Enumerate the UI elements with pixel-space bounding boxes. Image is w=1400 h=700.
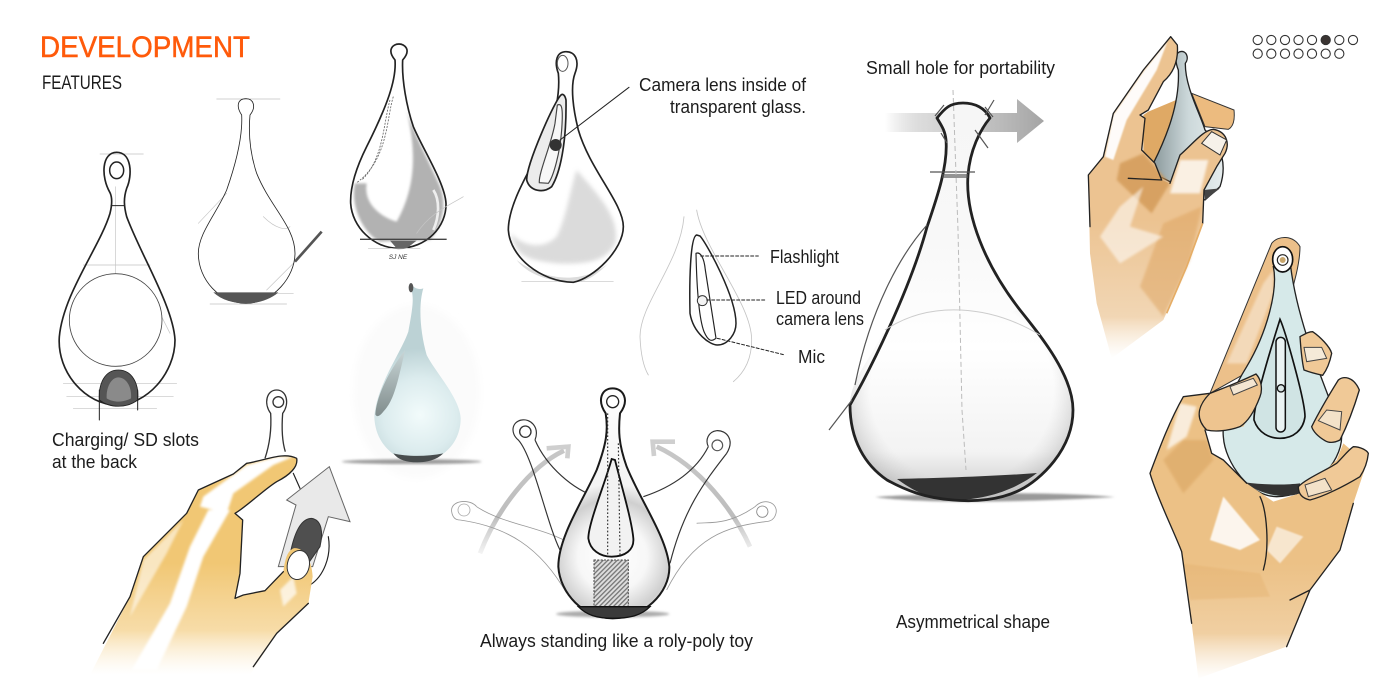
device [1153,51,1223,200]
hand highlights [130,457,297,670]
sketch: outline with pencil [198,99,322,304]
label: LED around camera lens: camera lens [776,309,864,329]
rendered blue drop [342,283,482,478]
title: DEVELOPMENT [40,31,250,64]
subtitle: FEATURES [42,73,122,94]
thumbnail [1202,132,1227,155]
detail sketch: window components [640,210,785,382]
finger: middle [1300,332,1332,375]
charging slot [291,518,322,563]
arrow: through hole [885,99,1044,143]
left hand holding device [90,390,350,675]
roly-poly diagram [452,388,776,618]
label: LED around camera lens [776,288,864,329]
sketch: shaded drop [351,44,463,248]
palm outline [1150,393,1353,647]
rotation arrows [480,442,750,553]
arrow: slide up [278,467,350,567]
top right hand [1088,37,1234,358]
tilted ghost positions [452,420,776,593]
device in left hand [265,390,329,585]
caption: charging slots [52,429,199,472]
ground shadow [556,611,669,617]
finger: thumb [1199,374,1261,431]
hand fill [1088,37,1227,358]
device front [1223,247,1342,497]
index finger [1210,237,1300,393]
hand shading [1100,42,1208,317]
thumbnail [285,548,312,582]
callout: camera lens: Camera lens inside of [639,74,807,95]
vase edge shading [850,310,1073,501]
callout: camera lens: transparent glass. [670,96,806,117]
base [897,473,1037,500]
caption: charging slots: Charging/ SD slots [52,429,199,450]
label: flashlight: Flashlight [770,247,839,267]
palm [1150,374,1367,678]
hand outline [1088,37,1227,227]
large asymmetric vase [829,90,1115,502]
finger: ring [1312,378,1359,442]
caption: asymmetrical: Asymmetrical shape [896,611,1050,632]
label: mic: Mic [798,347,825,367]
ground shadow [875,493,1115,502]
main upright body [558,388,669,618]
back finger [1192,93,1234,129]
palm behind device [1143,98,1180,183]
label: LED around camera lens: LED around [776,288,861,308]
sketch: back view with charging slot [59,152,177,420]
hand fill [90,456,313,675]
caption: charging slots: at the back [52,451,138,472]
palm shading [1163,403,1303,600]
caption: roly-poly: Always standing like a roly-poly toy [480,630,754,651]
construction lines [829,100,994,430]
callout: camera lens [639,74,807,117]
sketch: camera window drop [508,52,629,282]
vase body [850,103,1073,501]
bottom right hand [1150,237,1368,678]
outline [850,103,1073,501]
hand outline [103,456,308,667]
sketch signature: SJ NE [389,254,408,261]
progress dots [1253,35,1358,58]
finger: little [1298,447,1368,500]
caption: small hole: Small hole for portability [866,57,1056,78]
